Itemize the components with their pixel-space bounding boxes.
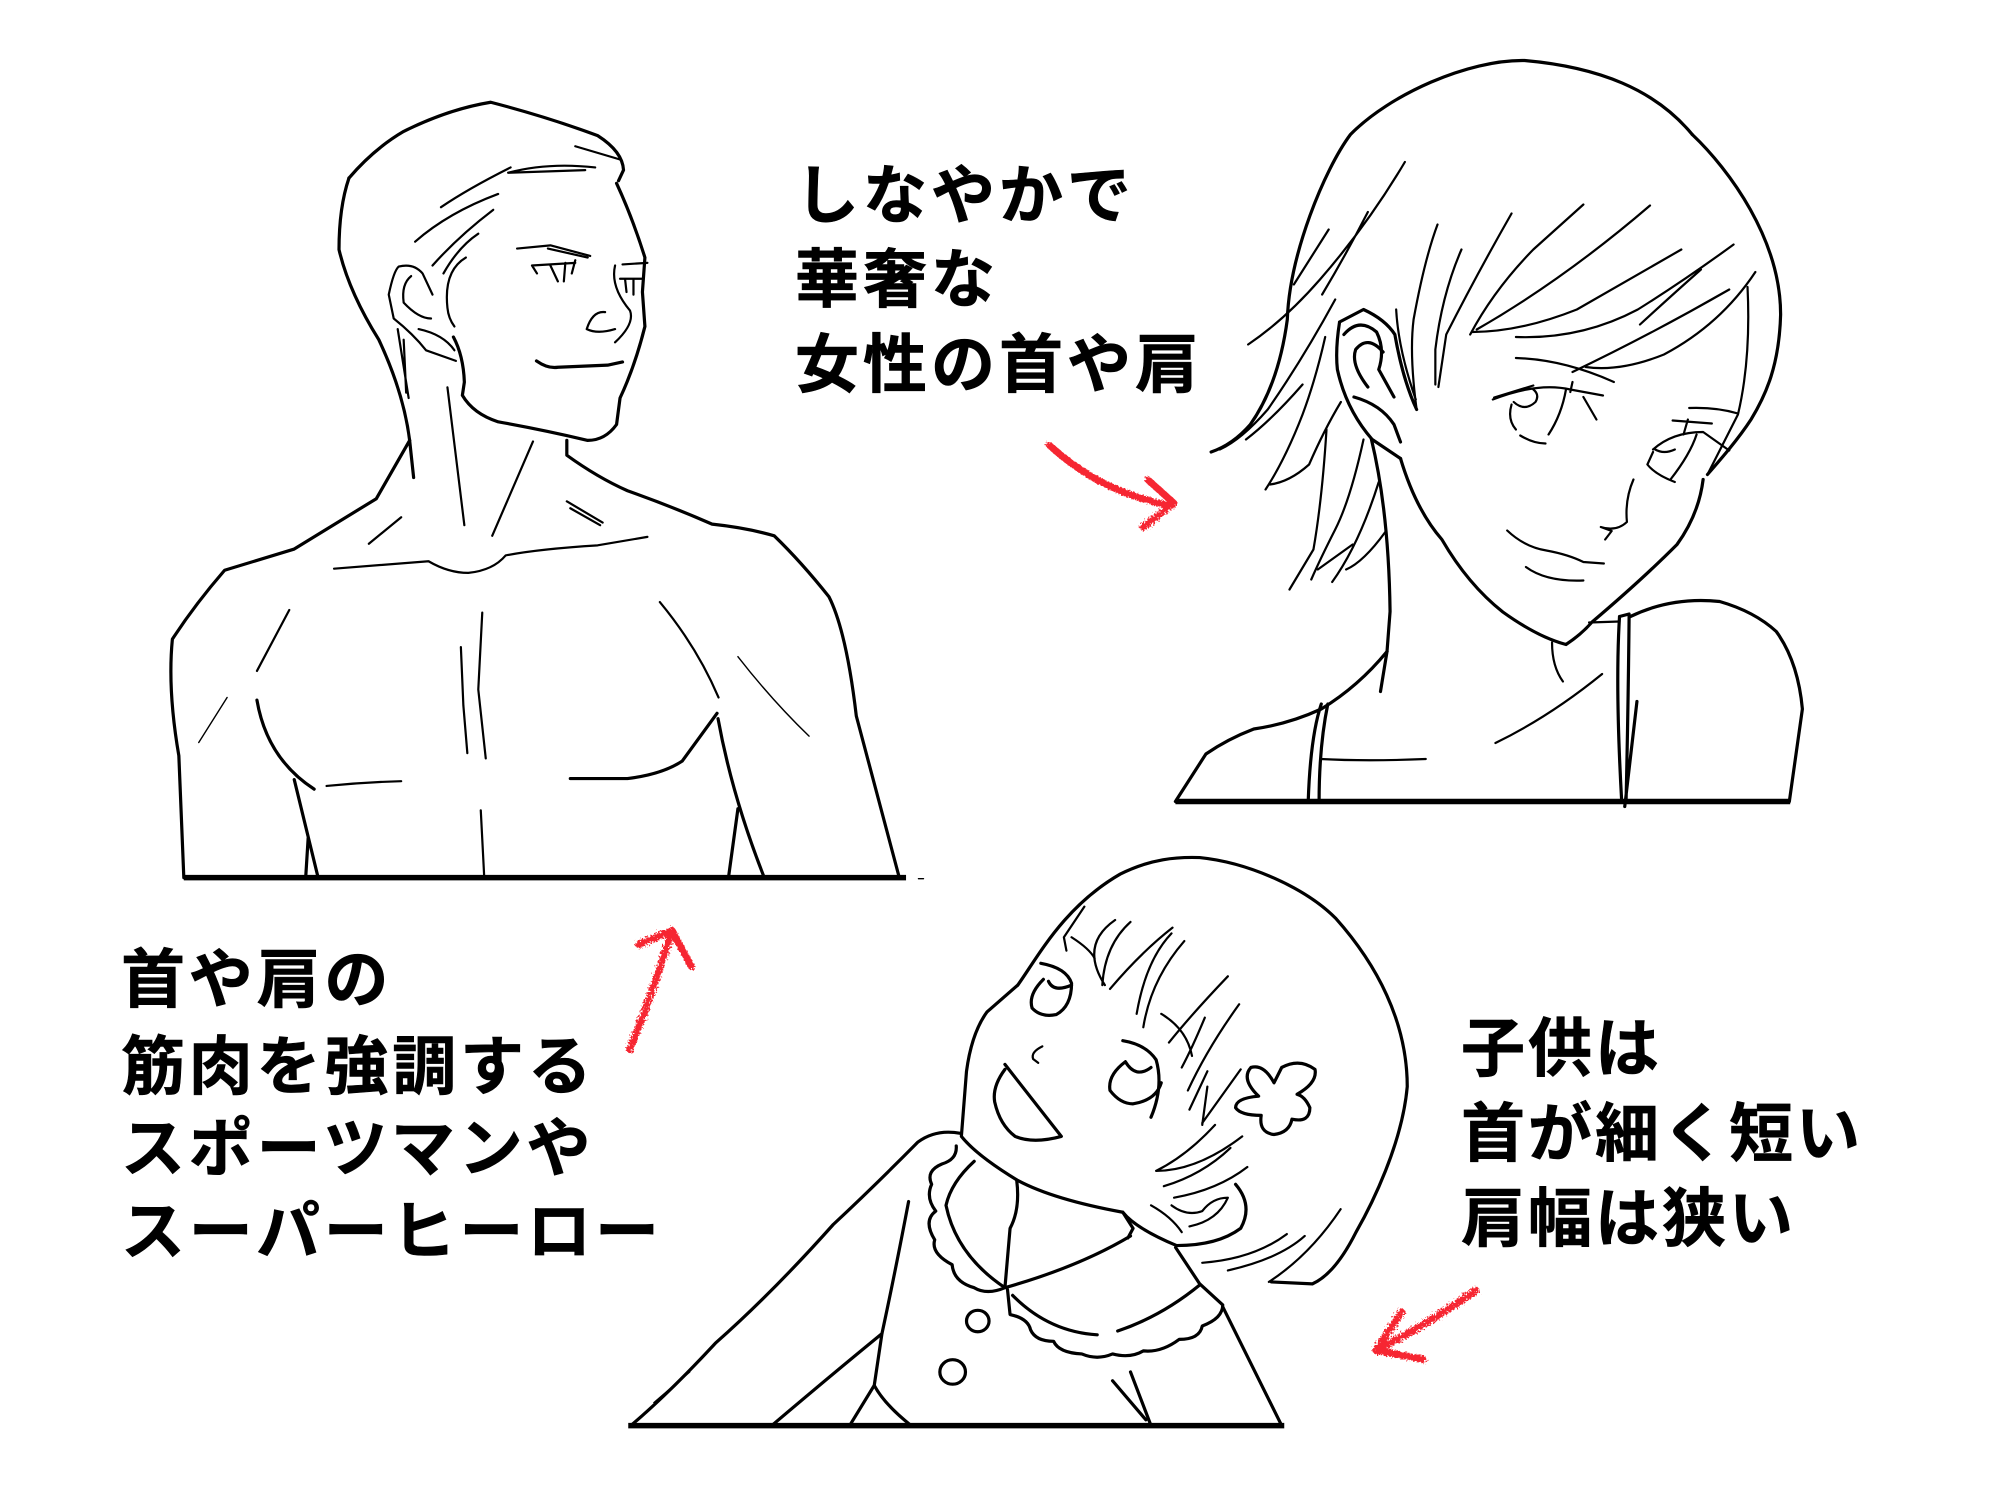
man: head and hair outline — [339, 102, 624, 477]
speck — [918, 878, 923, 880]
icon: flower hair clip — [1236, 1063, 1315, 1134]
man: face — [453, 183, 647, 440]
woman: base line — [1175, 799, 1790, 804]
man: ear — [389, 266, 456, 361]
text block: man caption: 筋肉を強調する — [121, 1031, 596, 1103]
arrow: to man — [630, 931, 691, 1050]
text block: woman caption: 華奢な — [795, 244, 999, 316]
woman: face — [1401, 358, 1738, 644]
child: face outline — [961, 985, 1246, 1246]
child: collar — [929, 1146, 1223, 1357]
text block: child caption: 首が細く短い — [1461, 1098, 1863, 1170]
child: eyes, nose and mouth — [994, 963, 1161, 1140]
text block: woman caption: しなやかで — [795, 160, 1135, 232]
child: ear — [1151, 1198, 1228, 1232]
child: body and sleeves — [631, 1132, 1282, 1426]
man: neck and shoulders — [171, 329, 899, 878]
man: base line — [184, 875, 906, 880]
arrow: to child — [1376, 1290, 1476, 1359]
child: bangs — [1064, 907, 1341, 1282]
text block: child caption — [1461, 1013, 1863, 1255]
text block: man caption: 首や肩の — [121, 944, 392, 1016]
icon: buttons — [940, 1310, 989, 1384]
text block: man caption — [121, 944, 663, 1268]
text block: child caption: 子供は — [1461, 1013, 1662, 1085]
figure: woman with short hair — [1175, 60, 1802, 807]
text block: man caption: スーパーヒーロー — [121, 1196, 663, 1268]
text block: man caption: スポーツマンや — [121, 1113, 594, 1185]
child: base line — [628, 1423, 1284, 1428]
text block: woman caption — [795, 160, 1203, 401]
man: chest muscles — [199, 602, 809, 878]
woman: hair outline and strands — [1211, 60, 1781, 590]
woman: neck, shoulders and straps — [1175, 439, 1802, 806]
text block: woman caption: 女性の首や肩 — [795, 329, 1203, 401]
figure: smiling child — [628, 857, 1407, 1426]
arrow: to woman — [1050, 445, 1174, 527]
child: head and hair outline — [1018, 857, 1407, 1284]
woman: ear — [1337, 310, 1417, 458]
text block: child caption: 肩幅は狭い — [1461, 1183, 1796, 1255]
figure: muscular man — [171, 102, 923, 879]
